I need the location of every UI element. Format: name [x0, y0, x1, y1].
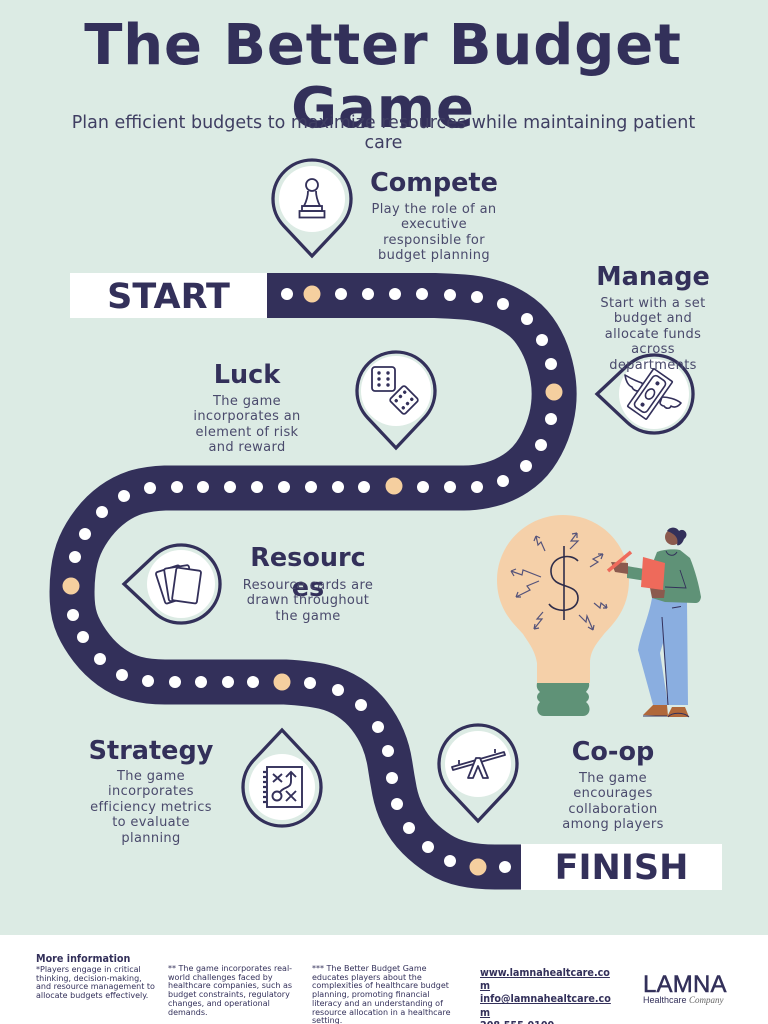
pin: strategy [243, 730, 321, 826]
text block: compete: Play the role of an [372, 202, 496, 217]
footer: note three [312, 964, 450, 1024]
text block: luck: and reward [208, 440, 286, 455]
footer: note two: demands. [168, 1008, 208, 1017]
footer: more information [36, 952, 155, 1000]
text block: strategy: to evaluate [112, 815, 190, 830]
footer: note three: educates players about the [312, 973, 422, 982]
text block: co-op [562, 737, 664, 832]
text block: manage [596, 262, 710, 373]
text block: resources: Resourc [250, 543, 366, 573]
text block: resources description: the game [275, 609, 341, 624]
footer: note two: budget constraints, regulatory [168, 990, 290, 999]
finish box [521, 844, 722, 890]
text block: compete: budget planning [378, 248, 490, 263]
start box [70, 273, 267, 318]
text block: manage: across [631, 342, 675, 357]
text block: co-op: among players [562, 817, 664, 832]
start label: START [107, 277, 230, 317]
text block: co-op: encourages [573, 786, 653, 801]
text block: resources description: drawn throughout [247, 593, 369, 608]
text block: resources [250, 543, 366, 603]
footer: note two: ** The game incorporates real- [168, 964, 292, 973]
footer: note two: world challenges faced by [168, 973, 273, 982]
text block: luck: The game [213, 394, 281, 409]
logo: lamna healthcare company: LAMNA [643, 971, 727, 998]
finish label: FINISH [555, 848, 688, 888]
illustration: light bulb with dollar sign [497, 515, 629, 716]
text block: compete: responsible for [383, 233, 485, 248]
footer: more information: *Players engage in critical [36, 965, 141, 974]
footer: more information: allocate budgets effectively. [36, 991, 148, 1000]
text block: co-op: The game [579, 771, 647, 786]
text block: manage: allocate funds [605, 327, 701, 342]
text block: resources description [243, 578, 373, 624]
title: Game [291, 76, 475, 141]
pin: co-op [439, 725, 517, 821]
text block: strategy: planning [121, 831, 181, 846]
footer: note three: *** The Better Budget Game [312, 964, 427, 973]
text block: manage: departments [609, 358, 697, 373]
footer: more information: thinking, decision-making, [36, 974, 142, 983]
pin: manage [597, 355, 693, 433]
text block: strategy [89, 736, 213, 846]
footer: more information: and resource management to [36, 982, 155, 991]
text block: resources description: Resource cards are [243, 578, 373, 593]
text block: strategy: The game [117, 769, 185, 784]
text block: luck [193, 360, 301, 455]
footer: note three: literacy and an understanding of [312, 999, 443, 1008]
text block: strategy: incorporates [108, 784, 194, 799]
footer: contact details: m [480, 979, 490, 992]
pin: luck [357, 352, 435, 448]
text block: resources: es [292, 573, 324, 603]
text block: co-op: collaboration [568, 802, 658, 817]
pin: compete [273, 160, 351, 256]
pin: resources [124, 545, 220, 623]
subtitle [72, 113, 695, 153]
text block: manage: Manage [596, 262, 710, 292]
logo: lamna healthcare company: Healthcare Company [643, 995, 724, 1005]
footer: note three: complexities of healthcare budget [312, 981, 449, 990]
footer: note two: healthcare companies, such as [168, 981, 292, 990]
text block: luck: Luck [214, 360, 280, 390]
title: The Better Budget [84, 13, 682, 78]
footer: contact details: info@lamnahealtcare.co [480, 992, 611, 1005]
text block: luck: incorporates an [193, 409, 301, 424]
subtitle: care [365, 133, 402, 153]
text block: manage: budget and [614, 311, 692, 326]
footer: note two: changes, and operational [168, 999, 270, 1008]
text block: strategy: efficiency metrics [90, 800, 212, 815]
text block: strategy: Strategy [89, 736, 213, 766]
footer: contact details: www.lamnahealtcare.co [480, 966, 610, 979]
footer: contact details [480, 966, 611, 1024]
text block: luck: element of risk [196, 425, 298, 440]
title [84, 13, 682, 141]
subtitle: Plan efficient budgets to maximize resources while maintaining patient [72, 113, 695, 133]
footer: contact details: m [480, 1006, 490, 1019]
footer: more information: More information [36, 952, 130, 965]
text block: co-op: Co-op [572, 737, 654, 767]
footer: note three: resource allocation in a healthcare [312, 1008, 450, 1017]
text block: compete: Compete [370, 168, 498, 198]
footer panel [0, 935, 768, 1024]
text block: compete [370, 168, 498, 263]
illustration: person holding clipboard and pencil [608, 528, 701, 717]
text block: compete: executive [401, 217, 467, 232]
road path [62, 286, 562, 876]
text block: manage: Start with a set [600, 296, 706, 311]
footer: note two [168, 964, 292, 1017]
footer: note three: planning, promoting financial [312, 990, 429, 999]
